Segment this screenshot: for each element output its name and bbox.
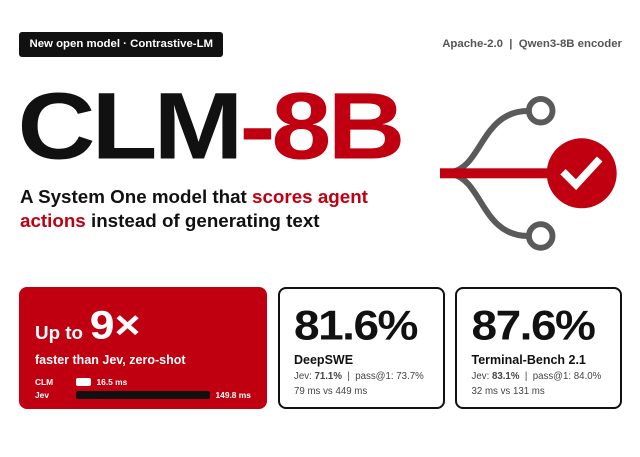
speed headline: Up to [35,322,83,343]
subtitle [20,186,368,231]
license and encoder note: Apache-2.0 | Qwen3-8B encoder [442,38,622,50]
subtitle: A System One model that scores agent [20,186,368,207]
Terminal-Bench score: 87.6% [472,302,594,348]
speed caption: faster than Jev, zero-shot [35,353,186,367]
latency bar chart [35,377,251,400]
Terminal-Bench name: Terminal-Bench 2.1 [472,353,586,367]
latency bar chart: CLM [35,377,53,387]
badge [19,32,223,57]
DeepSWE latency: 79 ms vs 449 ms [294,386,367,397]
panel: DeepSWE [278,287,444,409]
latency bar chart: 149.8 ms [216,390,251,400]
badge: New open model · Contrastive-LM [30,38,213,50]
DeepSWE score: 81.6% [294,302,417,348]
DeepSWE name: DeepSWE [294,353,353,367]
subtitle: actions instead of generating text [20,210,320,230]
panel: speed [19,287,267,409]
panel: Terminal-Bench [455,287,622,409]
latency bar chart: 16.5 ms [96,377,127,387]
Terminal-Bench comparison: Jev: 83.1% | pass@1: 84.0% [472,371,601,382]
title: CLM-8B [18,72,401,179]
DeepSWE comparison: Jev: 71.1% | pass@1: 73.7% [294,371,424,382]
latency bar chart: Jev [35,390,49,400]
speed headline: 9× [90,303,140,347]
speed headline [35,303,140,347]
Terminal-Bench latency: 32 ms vs 131 ms [472,386,545,397]
